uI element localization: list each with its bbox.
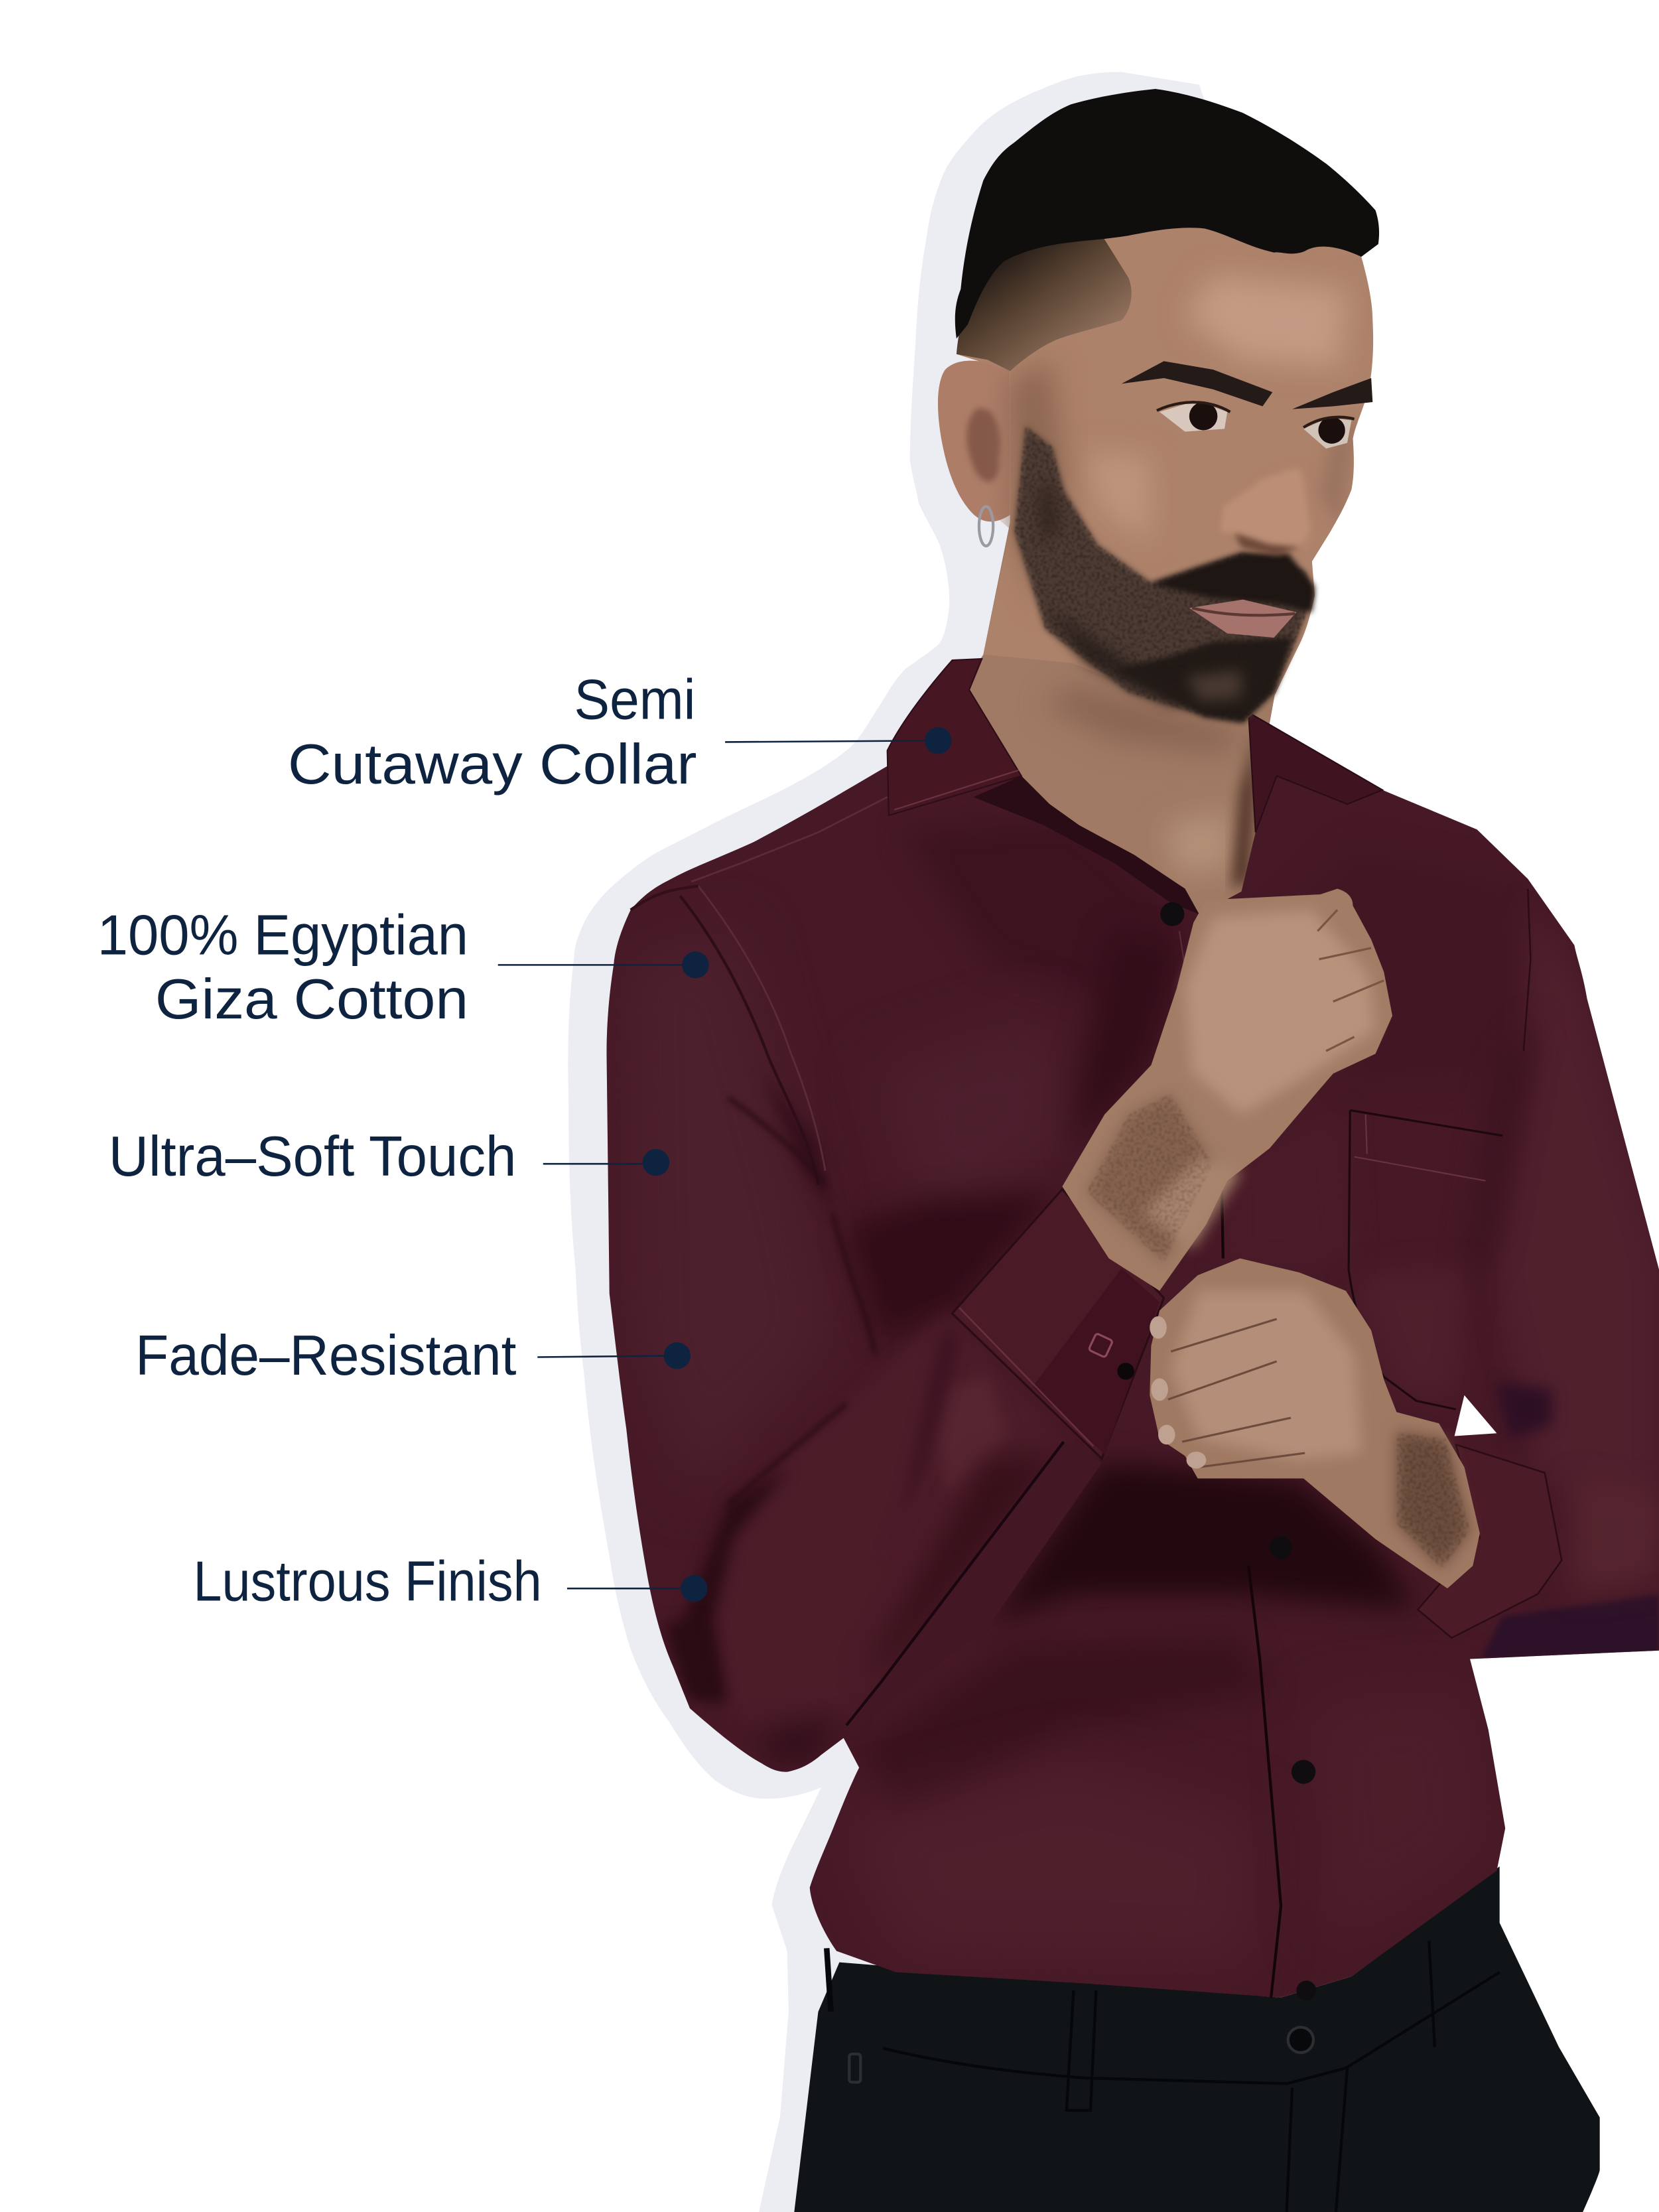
callout: ultra-soft touch: Ultra–Soft Touch — [109, 1125, 516, 1188]
right eye — [1303, 417, 1355, 449]
right eyebrow — [1292, 378, 1372, 409]
callout: semi cutaway collar: Cutaway Collar — [288, 733, 697, 796]
cuff button — [1117, 1363, 1134, 1379]
callout: egyptian giza cotton — [98, 904, 709, 1031]
lips — [1189, 600, 1296, 638]
upper fist — [1062, 889, 1392, 1291]
moustache — [1151, 553, 1315, 612]
cuff band — [1033, 1269, 1160, 1454]
torso right seam — [1524, 889, 1530, 1051]
shirt base — [606, 659, 1659, 1998]
nose shadow — [1234, 533, 1301, 556]
forearm tone — [705, 1314, 1064, 1750]
callout: lustrous finish: Lustrous Finish — [193, 1550, 542, 1613]
beard texture — [1014, 426, 1313, 723]
ear inner — [966, 408, 1000, 482]
sideburn — [1037, 480, 1061, 543]
cuff buttonhole — [1089, 1333, 1113, 1357]
chin light patch — [1185, 670, 1241, 701]
callout: egyptian giza cotton: 100% Egyptian — [98, 904, 468, 967]
wrist hair — [1396, 1432, 1470, 1568]
placket lines — [1222, 1186, 1281, 1998]
nose — [1221, 468, 1309, 550]
placket stitching — [1179, 931, 1193, 1023]
trouser details — [827, 1941, 1500, 2212]
trousers — [794, 1866, 1600, 2212]
collar left leaf — [888, 659, 1022, 815]
hair fade — [957, 233, 1132, 371]
head — [938, 89, 1379, 723]
neck shading — [1044, 684, 1258, 889]
sleeve seam shadow — [680, 896, 818, 1185]
ear — [938, 361, 1010, 521]
cuff stitching — [959, 1308, 1093, 1446]
sleeve seam — [698, 886, 825, 1171]
pocket — [1349, 1110, 1502, 1409]
sleeve folds — [728, 1097, 875, 1505]
shoulder cap stitching — [631, 886, 698, 910]
callout: semi cutaway collar — [288, 668, 951, 796]
beard jaw shadow — [1045, 606, 1199, 705]
lower hand — [1150, 1259, 1480, 1588]
collar — [888, 659, 1382, 914]
callout: egyptian giza cotton: Giza Cotton — [155, 968, 468, 1031]
face shading — [1009, 275, 1357, 606]
shirt buttons — [1160, 902, 1316, 2000]
left eyebrow — [1122, 361, 1272, 406]
beard base — [1014, 426, 1313, 723]
silhouette halo — [568, 72, 1270, 2212]
right cuff — [1418, 1444, 1561, 1638]
shirt — [606, 659, 1659, 2000]
beard dense chin — [1114, 638, 1292, 723]
earring — [979, 506, 993, 546]
collar stand — [973, 776, 1199, 914]
model figure — [606, 89, 1659, 2212]
side gap — [1455, 1395, 1496, 1436]
face skin — [957, 183, 1373, 723]
hair — [955, 89, 1379, 338]
callout: fade-resistant: Fade–Resistant — [135, 1324, 516, 1387]
fingernails — [1150, 1316, 1206, 1468]
collar right leaf — [1248, 713, 1382, 833]
shirt shading — [628, 818, 1659, 1961]
forearm hair — [1087, 1093, 1213, 1263]
yoke seam — [691, 797, 888, 882]
lip line — [1192, 608, 1295, 615]
callout: semi cutaway collar: Semi — [574, 668, 695, 731]
collar stitching — [894, 770, 1018, 809]
forearm seam — [846, 1442, 1064, 1725]
left eye — [1157, 401, 1230, 432]
neck — [959, 522, 1277, 945]
forearm outer strip — [846, 1442, 1102, 1734]
cuff — [953, 1189, 1164, 1459]
